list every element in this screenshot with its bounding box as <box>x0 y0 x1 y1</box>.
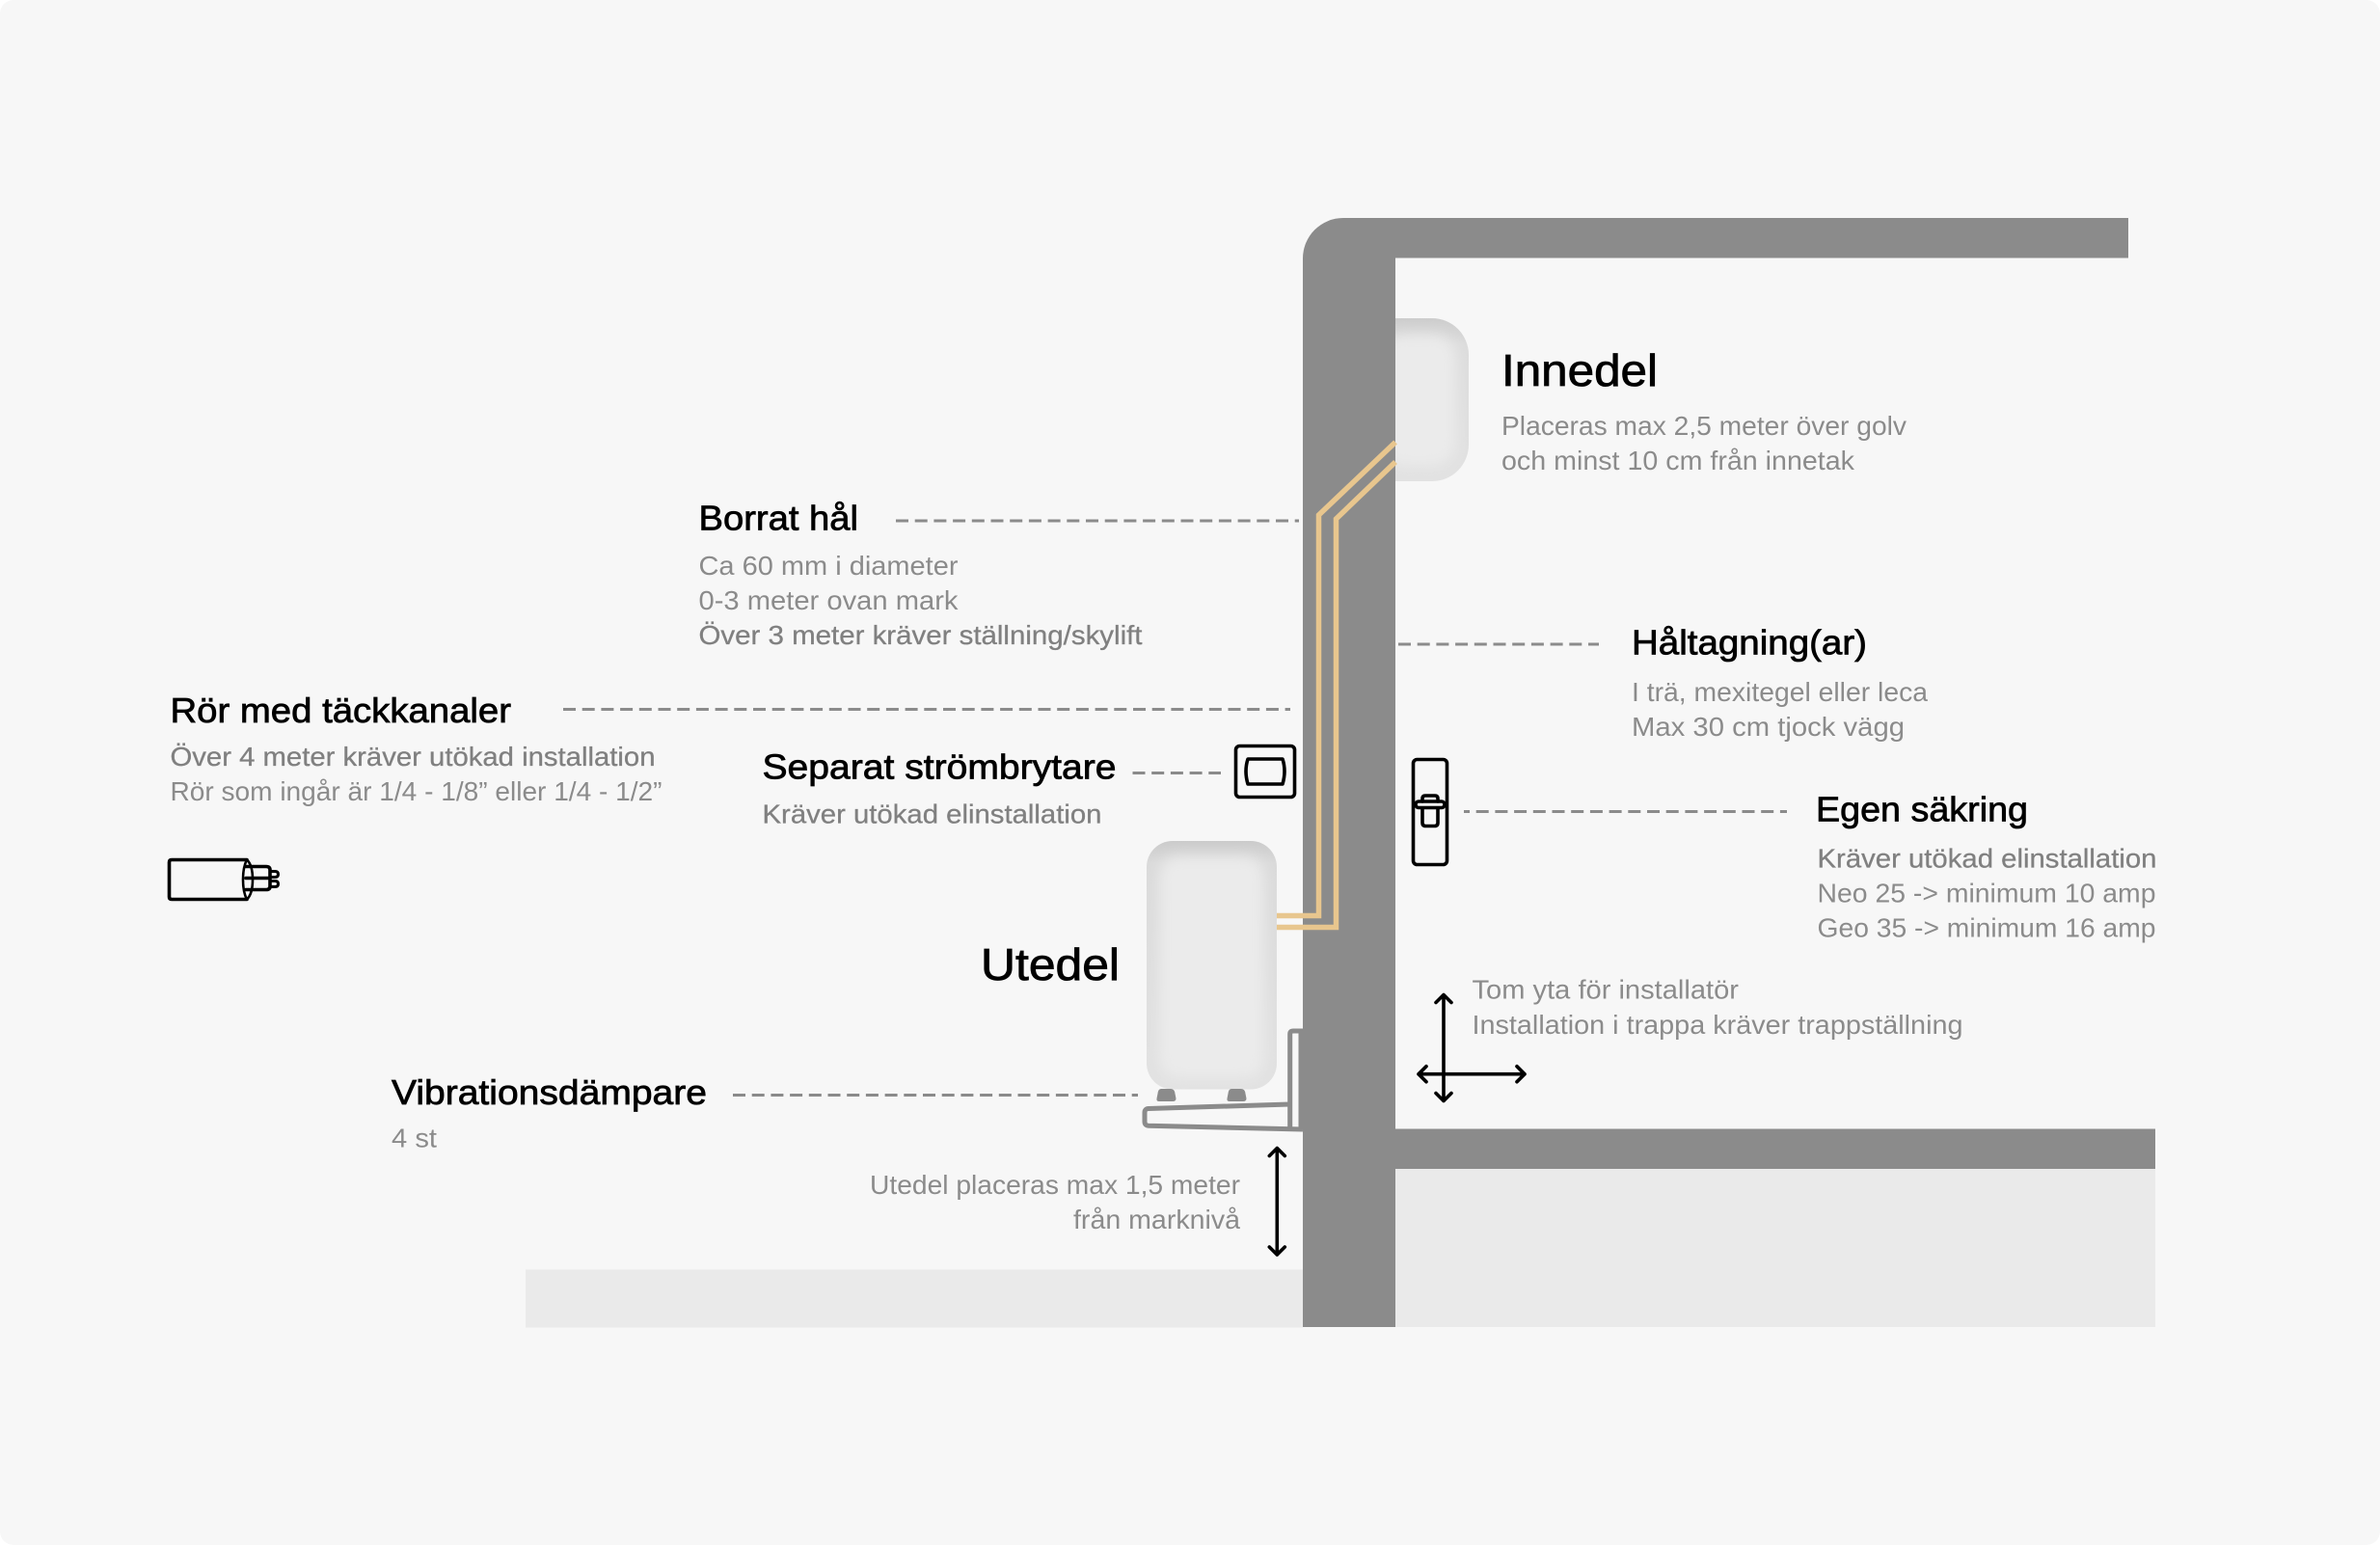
free space note <box>1472 974 1963 1040</box>
Borrat hål text: Ca 60 mm i diameter <box>698 551 959 581</box>
icon: fuse <box>1414 760 1447 864</box>
Separat strömbrytare text: Separat strömbrytare <box>762 746 1117 787</box>
Håltagning text: Max 30 cm tjock vägg <box>1632 712 1905 742</box>
icon: height arrow <box>1269 1148 1285 1255</box>
ground right <box>1395 1169 2155 1327</box>
Innedel text: Placeras max 2,5 meter över golv <box>1501 411 1907 441</box>
Egen säkring text: Kräver utökad elinstallation <box>1817 843 2156 874</box>
Borrat hål text: Över 3 meter kräver ställning/skylift <box>698 620 1143 650</box>
Innedel text <box>1501 345 1907 475</box>
icon: arrows free space <box>1419 995 1525 1101</box>
height note: från marknivå <box>1073 1205 1240 1234</box>
free space note: Installation i trappa kräver trappställning <box>1472 1010 1963 1040</box>
Borrat hål text <box>698 498 1143 650</box>
icon: pipe with cover <box>170 860 278 899</box>
free space note: Tom yta för installatör <box>1472 974 1739 1005</box>
Egen säkring text: Egen säkring <box>1816 789 2028 829</box>
Rör med täckkanaler text: Rör som ingår är 1/4 - 1/8” eller 1/4 - 1/2” <box>170 776 662 806</box>
Egen säkring text: Neo 25 -> minimum 10 amp <box>1817 878 2156 908</box>
outdoor unit <box>1147 841 1277 1090</box>
height note <box>870 1170 1240 1234</box>
Håltagning text: I trä, mexitegel eller leca <box>1632 677 1928 707</box>
Vibrationsdämpare text: 4 st <box>392 1123 437 1153</box>
Egen säkring text <box>1816 789 2156 943</box>
vibration dampers <box>1156 1089 1246 1101</box>
Vibrationsdämpare text <box>392 1072 707 1153</box>
indoor unit <box>1395 318 1469 481</box>
building walls and floor <box>1303 218 2155 1327</box>
Rör med täckkanaler text <box>170 691 662 806</box>
Utedel title: Utedel <box>981 939 1120 989</box>
Innedel text: Innedel <box>1501 345 1658 395</box>
height note: Utedel placeras max 1,5 meter <box>870 1170 1240 1200</box>
Borrat hål text: Borrat hål <box>698 498 858 538</box>
leader lines <box>563 521 1787 1096</box>
Håltagning text <box>1632 623 1928 742</box>
Separat strömbrytare text <box>762 746 1117 829</box>
icon: switch <box>1236 746 1294 797</box>
Vibrationsdämpare text: Vibrationsdämpare <box>392 1072 707 1112</box>
Håltagning text: Håltagning(ar) <box>1632 623 1867 662</box>
Rör med täckkanaler text: Över 4 meter kräver utökad installation <box>170 742 656 772</box>
Borrat hål text: 0-3 meter ovan mark <box>698 585 960 615</box>
refrigerant pipes <box>1277 442 1395 928</box>
Separat strömbrytare text: Kräver utökad elinstallation <box>762 799 1101 829</box>
Innedel text: och minst 10 cm från innetak <box>1501 446 1855 475</box>
Rör med täckkanaler text: Rör med täckkanaler <box>170 691 511 730</box>
ground left <box>526 1269 1303 1327</box>
wall bracket <box>1145 1031 1303 1129</box>
Egen säkring text: Geo 35 -> minimum 16 amp <box>1817 912 2156 943</box>
